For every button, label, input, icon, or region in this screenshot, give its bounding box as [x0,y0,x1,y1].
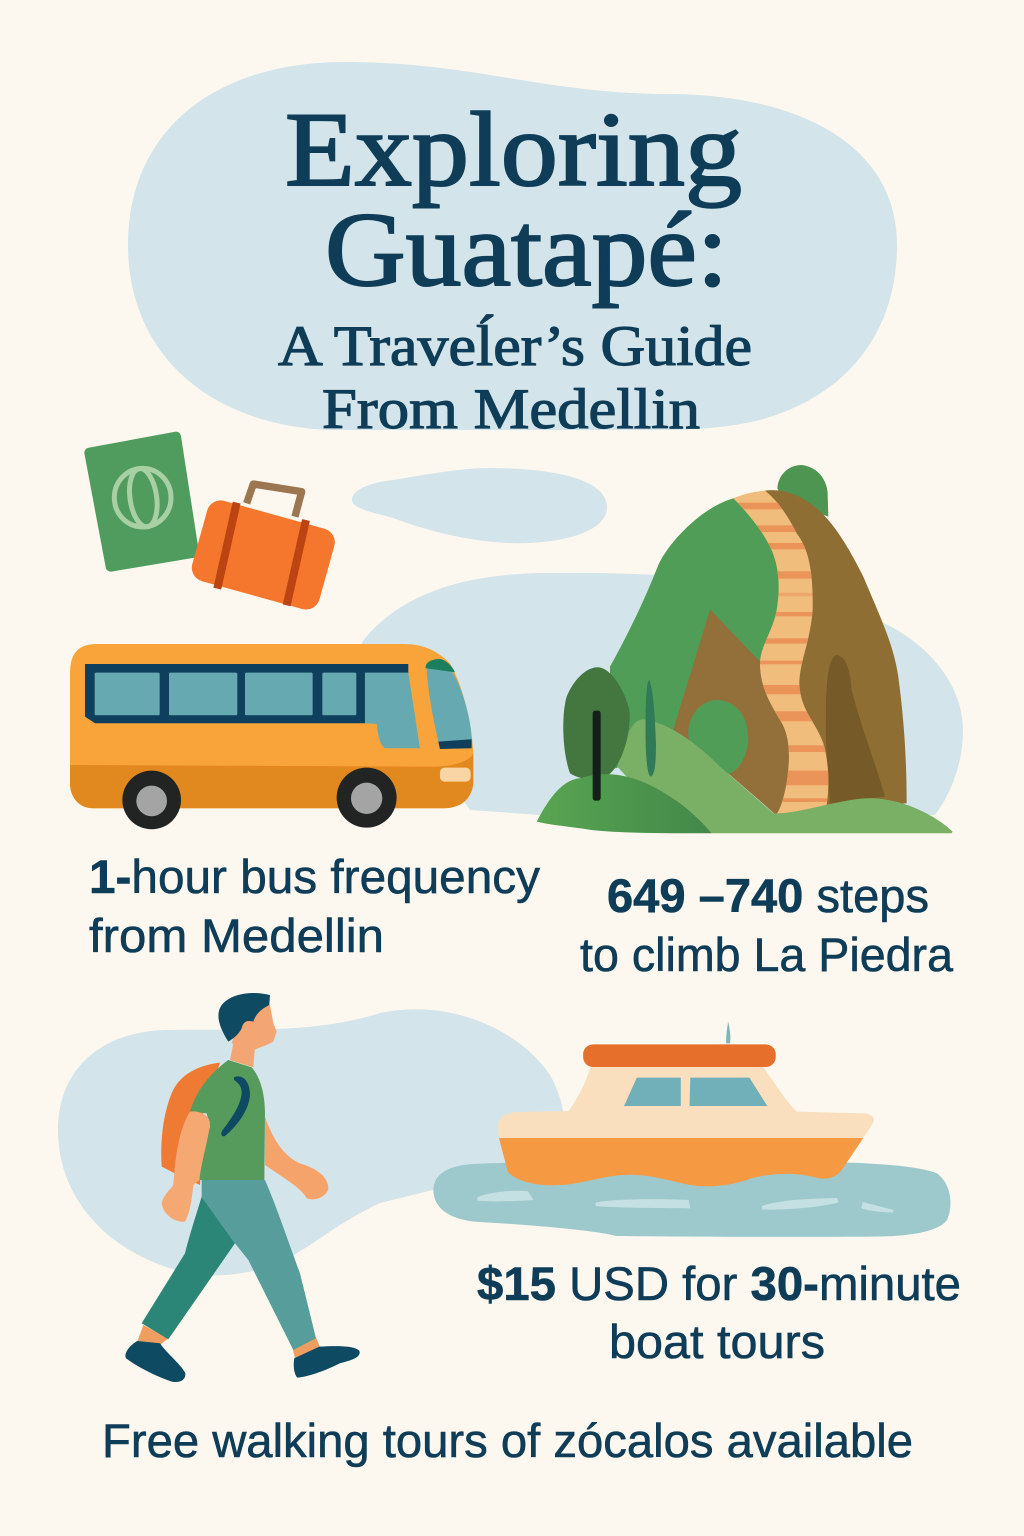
subtitle: A Traveĺer’s Guide [278,314,752,378]
stat: bus frequency: 1-hour bus frequency [89,850,541,903]
subtitle [278,314,752,441]
illustration: tour boat on water [433,1022,951,1237]
stat: steps to climb [580,869,954,981]
stat: boat tour price: boat tours [609,1315,825,1368]
illustration: La Piedra mountain [537,465,953,833]
illustration: walking traveler [125,993,360,1382]
subtitle: From Medellin [322,378,700,441]
small cloud [352,468,607,543]
stat: bus frequency: from Medellin [89,909,384,962]
lower cloud behind walker and boat [58,1009,564,1276]
stat: boat tour price: $15 USD for 30-minute [477,1257,961,1310]
middle cloud behind bus and mountain [360,573,963,815]
stat: steps to climb: 649 –740 steps [607,869,929,922]
stat: free walking tours: Free walking tours of zócalos available [102,1414,913,1467]
illustration: bus [70,644,473,829]
title backdrop blob [128,62,897,430]
icon: suitcase [189,484,338,613]
stat: bus frequency [89,850,541,962]
stat: boat tour price [477,1257,961,1368]
title: Exploring Guatapé [285,91,742,308]
stat: steps to climb: to climb La Piedra [580,928,954,981]
title: Exploring Guatapé: Guatapé: [325,191,728,308]
icon: passport [89,437,194,567]
tree [563,667,630,779]
stone staircase [730,491,830,815]
title: Exploring Guatapé: Exploring [285,91,742,208]
